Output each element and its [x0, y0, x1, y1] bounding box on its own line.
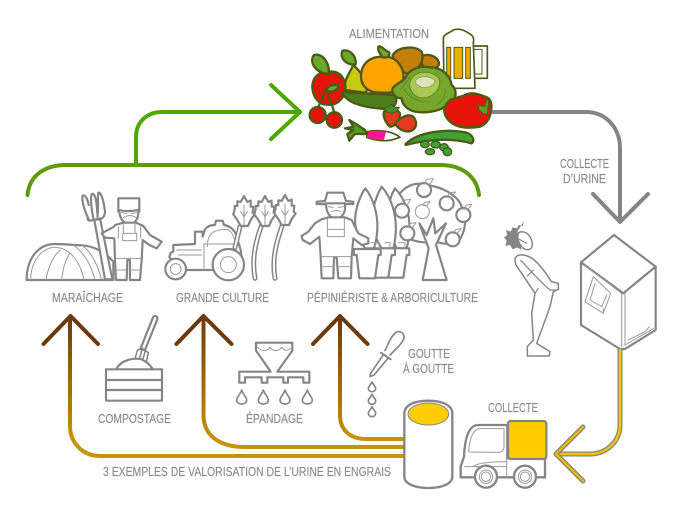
icon: dropper with drops [368, 332, 404, 417]
icon: pumpkin [361, 46, 404, 93]
icon: spreader with drops [237, 343, 312, 404]
icon: cabbage [392, 67, 456, 112]
food illustration [310, 29, 491, 156]
heading: pepinieriste: PÉPINIÉRISTE & ARBORICULTURE [307, 290, 478, 305]
icon: strawberries [383, 104, 416, 131]
label: valorisation: 3 EXEMPLES DE VALORISATION DE L’URINE EN ENGRAIS [103, 465, 391, 479]
icon: potatoes [393, 48, 439, 75]
icon: pear [342, 50, 367, 93]
heading: collecte truck: COLLECTE [488, 401, 538, 415]
icon: greenhouse and farmer with fork [27, 193, 162, 280]
icon: collection truck [461, 421, 546, 488]
icon: tractor [165, 221, 244, 280]
icon: storage tank [404, 401, 452, 488]
label: collecte d'urine: D’URINE [563, 172, 606, 186]
arrowheads: brown [44, 316, 368, 344]
arrows: brown fertiliser routes [70, 317, 404, 456]
icon: wheat [233, 195, 296, 278]
heading: alimentation: ALIMENTATION [349, 27, 429, 41]
icon: radish [345, 120, 400, 141]
arrow: green to food [136, 85, 300, 165]
arrow: grey urine collection [492, 112, 648, 222]
icon: nursery worker, trees and apple tree [302, 179, 472, 280]
icon: cucumber [343, 92, 396, 109]
label: collecte d'urine [560, 157, 609, 186]
heading: epandage: ÉPANDAGE [246, 411, 303, 426]
label: goutte a goutte [403, 347, 454, 376]
icon: cherries [310, 85, 342, 128]
icon: compost crate with fork [106, 316, 162, 401]
arrow: yellow to truck [556, 349, 620, 481]
icon: man bending at urinal [504, 221, 558, 356]
icon: bell pepper [444, 93, 491, 128]
icon: beer mug [443, 29, 487, 88]
heading: grande culture: GRANDE CULTURE [176, 291, 269, 305]
label: goutte a goutte: GOUTTE [408, 347, 450, 361]
icon: apple [312, 55, 346, 105]
label: goutte a goutte: À GOUTTE [403, 361, 454, 376]
label: collecte d'urine: COLLECTE [560, 157, 609, 171]
heading: maraichage: MARAÎCHAGE [52, 290, 123, 305]
heading: compostage: COMPOSTAGE [98, 412, 171, 426]
icon: urine collector box [581, 235, 656, 349]
arc: green farming bracket [28, 165, 479, 195]
icon: pea pod [406, 131, 473, 156]
